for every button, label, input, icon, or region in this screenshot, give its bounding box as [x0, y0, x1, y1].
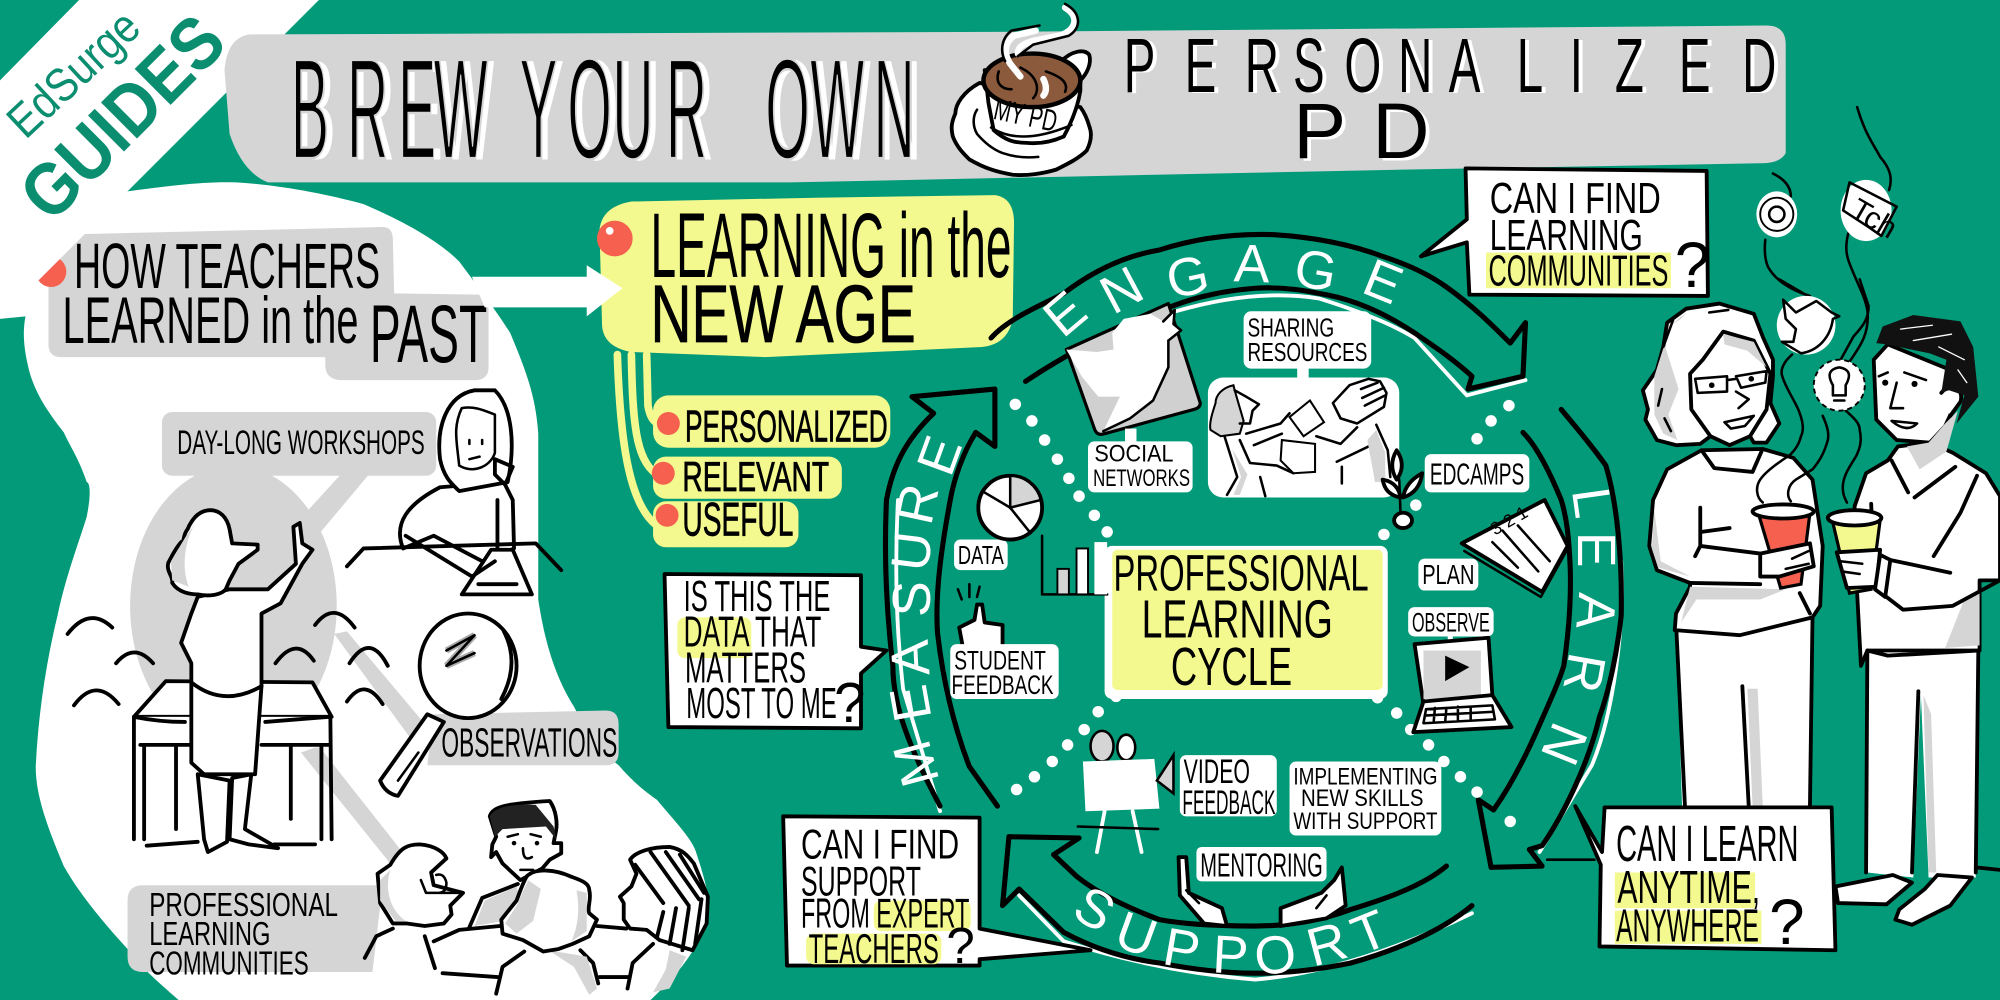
illustration: woman with cup [1643, 304, 1823, 816]
label: sharing resources [1244, 311, 1371, 380]
arrow label: measure: E [906, 429, 974, 483]
label: data: DATA [958, 542, 1004, 570]
title text: personalized: PERSONALIZED [1128, 25, 1780, 110]
cup label: MY PD [991, 92, 1060, 139]
title text: brew your own: BREW YOUR OWN [4, 32, 921, 191]
heading text: past: HOW TEACHERS [74, 230, 380, 302]
label: video feedback: VIDEO [1184, 753, 1250, 791]
callout: can I learn anytime anywhere: ? [1769, 886, 1805, 958]
arrow label: engage: E [1033, 280, 1098, 348]
arrow label: measure: R [885, 479, 951, 529]
arrow label: learn: L [1560, 484, 1623, 522]
arrow label: support: P [1211, 925, 1250, 986]
arrow: support [1003, 837, 1472, 987]
heading text: past: PAST [370, 289, 487, 380]
arrow: measure [879, 389, 997, 811]
icon: thumbs up [958, 584, 1003, 648]
hair [1643, 304, 1779, 445]
label: professional learning communities [128, 885, 383, 982]
panel: professional learning cycle [1105, 545, 1388, 699]
yellow connectors [617, 355, 658, 526]
arrow label: engage: N [1091, 256, 1153, 326]
title text: PD: PD [1297, 89, 1433, 178]
callout: can I find support [783, 816, 1091, 974]
callout: can I find support: FROM EXPERT [801, 889, 969, 936]
label: observations [427, 710, 619, 765]
label: data [954, 540, 1008, 570]
arrow label: measure: M [883, 734, 951, 793]
panel: how teachers learned in the past [0, 182, 709, 1000]
callout: can I learn anytime anywhere [1547, 806, 1835, 958]
label: social networks: SOCIAL [1094, 441, 1173, 468]
icon: pie chart [978, 476, 1042, 540]
arrow label: support: P [1159, 917, 1204, 982]
label: student feedback [950, 644, 1059, 700]
item: useful: USEFUL [682, 494, 793, 547]
callout: is this the data [665, 573, 886, 734]
callout: can I learn anytime anywhere: ANYWHERE [1616, 899, 1759, 951]
trousers [1676, 617, 1812, 816]
logo band: EdSurge Guides [0, 0, 319, 319]
arrow label: measure: S [882, 580, 942, 618]
label: edcamps: EDCAMPS [1430, 458, 1524, 492]
teacher hair [168, 510, 258, 595]
teacher body [181, 523, 312, 774]
arrow label: support: R [1301, 911, 1353, 978]
arrow label: support: O [1252, 925, 1299, 987]
icon: magnifying glass [380, 614, 517, 796]
arrow: learn [1478, 409, 1626, 867]
heading text: past [62, 230, 487, 380]
label: implementing new skills with support: WITH SUPPORT [1293, 808, 1438, 835]
arrow label: engage: A [1233, 234, 1271, 295]
icon: plant seedling [1383, 450, 1422, 528]
red cup [1753, 504, 1814, 588]
label: edcamps [1425, 454, 1529, 492]
item: relevant: RELEVANT [682, 453, 829, 500]
label: professional learning communities: PROFESSIONAL [149, 887, 338, 924]
arrow label: support: S [1064, 875, 1124, 944]
label: social networks [1088, 429, 1193, 492]
illustration: man with cup [1828, 315, 2000, 925]
audience chevrons [68, 613, 388, 705]
label: implementing new skills with support [1290, 761, 1441, 835]
sweater [1855, 443, 2000, 666]
label: professional learning communities: COMMUNITIES [149, 945, 309, 982]
label: observe: OBSERVE [1412, 607, 1490, 637]
icon: Tch chat: Tch [1845, 192, 1903, 245]
person: man with hatched hair [469, 801, 561, 927]
panel: learning in the new age [597, 195, 1014, 547]
icon: coffee cup MY PD [952, 4, 1091, 175]
item: personalized [653, 395, 890, 451]
callout: is this the data: MOST TO ME [686, 680, 837, 728]
icon: notebook plan: 3 2 1 [1487, 502, 1531, 539]
callout: can I find learning communities: ? [1675, 229, 1710, 301]
arrow label: learn [1529, 484, 1626, 773]
red bullet: new age [597, 221, 633, 256]
label: observe [1408, 607, 1494, 642]
illustration: woman on phone [347, 390, 561, 594]
illustration: group of colleagues [365, 801, 708, 995]
cycle text: CYCLE [1171, 638, 1292, 697]
connector lines gray [261, 473, 427, 883]
illustration: sharing resources [1208, 378, 1399, 497]
head [1874, 344, 1960, 443]
heading text: new age: NEW AGE [651, 269, 916, 360]
papers [1281, 401, 1324, 473]
icon: twitter tile [1066, 304, 1200, 434]
label: mentoring [1196, 847, 1327, 884]
cycle text: LEARNING [1142, 591, 1333, 650]
icon: laptop [1413, 638, 1511, 732]
heading text: new age [651, 195, 1011, 360]
item: relevant [652, 453, 842, 500]
callout: can I find learning communities [1421, 168, 1710, 301]
icon: video camera [1078, 731, 1173, 852]
person: woman with glasses [365, 844, 629, 977]
teacher legs [198, 774, 278, 852]
heading text: new age: LEARNING in the [651, 195, 1011, 297]
title text: brew your own: BREW YOUR OWN [0, 31, 915, 190]
label: student feedback: FEEDBACK [952, 670, 1054, 700]
callout: can I find support: CAN I FIND [801, 820, 959, 867]
callout: can I learn anytime anywhere: ANYTIME, [1617, 861, 1760, 913]
callout: can I find learning communities: CAN I FIND [1490, 175, 1661, 223]
title text: personalized: PERSONALIZED [1124, 23, 1776, 109]
icon: notebook plan [1462, 500, 1568, 597]
man receiving papers [1316, 379, 1390, 483]
yellow cup [1828, 510, 1890, 597]
arrow label: learn: N [1529, 715, 1598, 773]
woman handing papers [1210, 385, 1293, 496]
item: personalized: PERSONALIZED [685, 402, 888, 451]
arrow label: support: U [1108, 901, 1164, 969]
title text: PD: PD [1293, 86, 1430, 175]
person: woman with long dark hair [620, 847, 708, 992]
label: sharing resources: RESOURCES [1247, 339, 1367, 367]
arrow label: support [1064, 875, 1396, 987]
item: useful [653, 494, 798, 547]
dotted cross lines [1010, 399, 1516, 827]
arrow: engage [991, 234, 1526, 395]
arrow label: support: T [1344, 899, 1396, 966]
label: observations: OBSERVATIONS [441, 719, 617, 765]
heading text: past: LEARNED in the [62, 284, 358, 358]
label: video feedback: FEEDBACK [1182, 784, 1276, 822]
callout: is this the data: MATTERS [685, 644, 806, 692]
callout: can I find learning communities: COMMUNITIES [1489, 248, 1668, 296]
arrow label: learn: A [1564, 591, 1626, 632]
callout: is this the data: DATA THAT [684, 609, 821, 657]
face [1690, 332, 1770, 445]
illustration: teacher at table [130, 466, 337, 852]
red bullet: past [36, 256, 66, 287]
label: social networks: NETWORKS [1093, 465, 1190, 492]
icon: twitter bubble [1777, 296, 1839, 355]
icon: bar chart [1042, 536, 1107, 594]
face details [1879, 372, 1926, 428]
arrow label: engage: E [1355, 248, 1410, 316]
callout: can I find support: SUPPORT [801, 857, 921, 904]
label: professional learning communities: LEARNING [149, 916, 270, 953]
icon: mentoring hands [1179, 857, 1346, 926]
label: video feedback [1180, 753, 1277, 822]
label: implementing new skills with support: NEW SKILLS [1301, 785, 1423, 812]
callout: can I find support: TEACHERS [809, 925, 939, 972]
label: mentoring: MENTORING [1200, 847, 1323, 884]
arrow label: engage [1033, 234, 1410, 348]
box: new age [599, 195, 1014, 357]
illustration: floating idea icons [1756, 107, 1903, 503]
arrow label: measure [879, 429, 974, 793]
title bar [0, 23, 1786, 191]
arrow label: learn: E [1566, 532, 1625, 568]
arrow: past to new age [472, 265, 622, 316]
callout: can I find support: ? [946, 917, 975, 974]
cycle text: PROFESSIONAL [1114, 545, 1369, 602]
arrow label: measure: U [881, 529, 944, 574]
sweater [1649, 449, 1823, 635]
callout: can I find learning communities: LEARNING [1490, 212, 1643, 260]
label: implementing new skills with support: IMPLEMENTING [1293, 763, 1437, 790]
callout: is this the data: ? [834, 671, 865, 734]
person: back of head [496, 870, 598, 995]
icon: target bubble [1756, 191, 1797, 237]
icon: lightbulb bubble [1814, 360, 1865, 411]
cycle text [1114, 545, 1369, 697]
arrow label: engage: G [1161, 244, 1214, 311]
label: day-long workshops: DAY-LONG WORKSHOPS [177, 424, 425, 462]
arrow label: learn: R [1551, 649, 1616, 697]
label: sharing resources: SHARING [1247, 315, 1334, 343]
label: day-long workshops [162, 412, 436, 476]
steam [1006, 8, 1074, 96]
hair [1876, 315, 1978, 423]
arrow label: engage: G [1290, 238, 1341, 304]
trousers and shoes [1835, 648, 2000, 925]
label: plan: PLAN [1422, 559, 1474, 590]
callout: is this the data: IS THIS THE [684, 573, 830, 621]
arrow label: measure: E [879, 681, 943, 726]
arrow label: measure: A [881, 638, 941, 677]
callout: can I learn anytime anywhere: CAN I LEARN [1616, 815, 1798, 872]
label: student feedback: STUDENT [954, 646, 1046, 676]
heading box: past [48, 227, 489, 380]
